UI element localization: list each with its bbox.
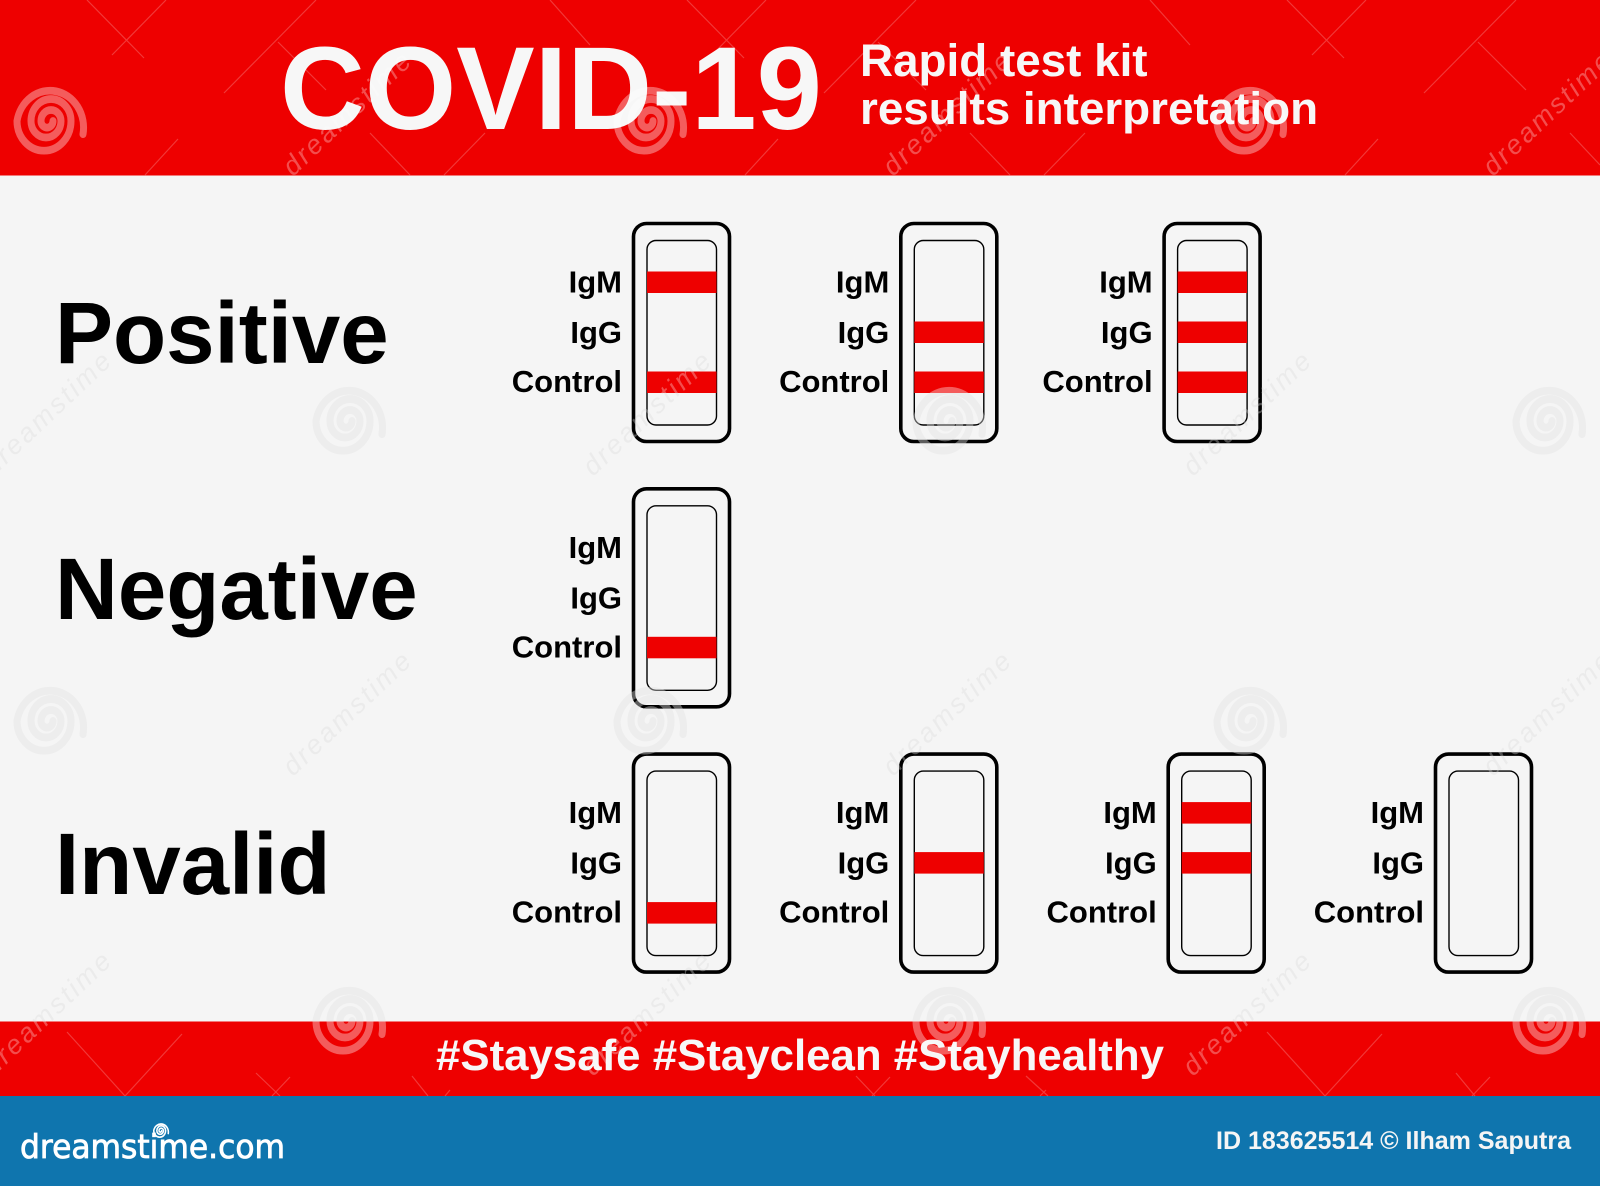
test kit: negative, Control only: IgM (569, 530, 622, 565)
watermark text on light background: dreamstime (276, 646, 417, 781)
watermark spirals (17, 91, 1583, 1051)
test kit: positive, IgM, IgG and Control: IgM (1099, 264, 1153, 300)
test kit: positive, IgG and Control (779, 224, 997, 442)
test kit: negative, Control only: IgG (570, 580, 622, 615)
image credit: ID 183625514 © Ilham Saputra (1216, 1127, 1572, 1155)
test kit: invalid, IgG only: IgG (838, 846, 889, 881)
subtitle: results interpretation (860, 83, 1318, 134)
test kit: invalid, IgM and IgG: Control (1046, 895, 1157, 930)
watermark text on light background (0, 346, 1600, 1081)
heading: Invalid: Invalid (55, 816, 331, 913)
test kit: invalid, IgM and IgG (1046, 754, 1264, 972)
subtitle (860, 35, 1318, 134)
subtitle: Rapid test kit (860, 35, 1148, 86)
test kit: invalid, Control only: IgM (569, 795, 622, 830)
test kit: invalid, Control only (512, 754, 730, 972)
watermark text: dreamstime (1176, 346, 1317, 481)
test kit: positive, IgG and Control: IgM (836, 264, 889, 300)
title: COVID-19 (280, 23, 822, 154)
test kit: negative, Control only: Control (512, 629, 622, 664)
test kit: positive, IgM and Control: IgG (570, 315, 622, 350)
credit band (0, 1096, 1600, 1186)
test kit: invalid, Control only: Control (512, 895, 622, 930)
hashtags: #Staysafe #Stayclean #Stayhealthy (436, 1031, 1165, 1080)
watermark text: dreamstime (1176, 946, 1317, 1081)
watermark text on light background: dreamstime (1176, 946, 1317, 1081)
header band (0, 0, 1600, 176)
watermark text: dreamstime (276, 646, 417, 781)
test kit: invalid, Control only: IgG (570, 846, 622, 881)
test kit: positive, IgM and Control: IgM (569, 264, 622, 300)
test kit: positive, IgM, IgG and Control: Control (1042, 364, 1153, 399)
watermark text on light background: dreamstime (1176, 346, 1317, 481)
watermark text on light background: dreamstime (876, 646, 1017, 781)
test kit: negative, Control only (512, 489, 730, 707)
test kit: invalid, IgM and IgG: IgM (1103, 795, 1157, 830)
heading: Positive: Positive (55, 285, 389, 382)
test kit: invalid, no lines: IgM (1371, 795, 1424, 830)
watermark text: dreamstime (876, 46, 1017, 181)
watermark text on light background: dreamstime (576, 346, 717, 481)
watermark outlines on light background (17, 391, 1583, 1051)
heading: Negative: Negative (55, 541, 418, 638)
watermark text: dreamstime (876, 646, 1017, 781)
test kit: positive, IgM and Control (512, 224, 730, 442)
test kit: invalid, no lines: Control (1314, 895, 1424, 930)
test kit: positive, IgM and Control: Control (512, 364, 622, 399)
test kit: positive, IgM, IgG and Control: IgG (1101, 315, 1153, 350)
logo: dreamstime.com: dreamstime.com (20, 1127, 285, 1166)
watermark text: dreamstime (576, 346, 717, 481)
test kit: invalid, IgG only (779, 754, 997, 972)
watermark text on light background: dreamstime (576, 946, 717, 1081)
watermark text: dreamstime (576, 946, 717, 1081)
test kit: invalid, IgG only: Control (779, 895, 889, 930)
hashtag band (0, 1022, 1600, 1096)
test kit: invalid, IgM and IgG: IgG (1105, 846, 1157, 881)
test kit: positive, IgG and Control: Control (779, 364, 889, 399)
test kit: invalid, no lines: IgG (1372, 846, 1424, 881)
test kit: invalid, no lines (1314, 754, 1532, 972)
test kit: positive, IgM, IgG and Control (1042, 224, 1260, 442)
watermark text: dreamstime (276, 46, 417, 181)
test kit: invalid, IgG only: IgM (836, 795, 889, 830)
test kit: positive, IgG and Control: IgG (838, 315, 889, 350)
